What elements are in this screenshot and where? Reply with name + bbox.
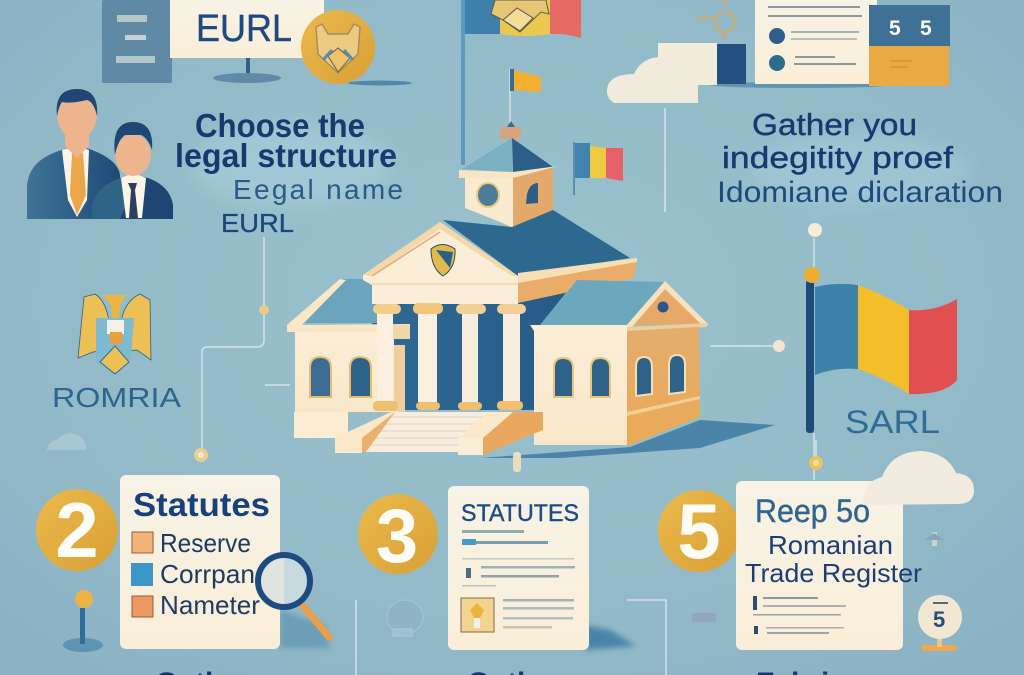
label: SARL: SARL [845,404,940,440]
badge: number 2 [36,486,118,574]
icon: monitor stand [213,58,281,83]
building: neoclassical government hall [287,121,775,458]
icon: medal number 5: 5 [933,607,945,632]
cupola [459,121,558,228]
badge: number 2: 2 [55,486,99,574]
stacked number box: 5 [920,17,932,40]
heading: choose the legal structure: EURL [221,208,294,238]
top centre flag [461,0,581,165]
mid flag [574,142,623,195]
navy recess behind columns [372,278,578,410]
left wing [287,279,410,438]
sign board: EURL [196,8,292,50]
right entablature side [518,259,637,303]
stacked number box: 5 [889,17,901,40]
card: Nameter [160,590,260,620]
cut-off captions at bottom edge [155,667,863,675]
connector lines [202,108,816,675]
badge: number 3: 3 [376,494,418,579]
icon: gold coat of arms coin [301,10,412,86]
heading: gather your identity proof: Idomiane diclaration [717,176,1003,209]
main roof [443,210,630,276]
icon: pin [63,590,103,652]
heading: gather your identity proof: Gather you [752,107,917,142]
connector dots [194,223,823,472]
heading: choose the legal structure: legal structure [175,137,397,174]
icon: cloud [607,57,698,103]
columns [373,303,526,411]
icon: filing cabinet [102,0,172,83]
soft glow behind right heading [750,134,970,206]
card: Reserve [160,528,251,558]
icon: medal number 5 [918,595,962,651]
step 5 panel [658,451,974,651]
card: Trade Register [745,558,922,588]
badge: number 3 [358,494,438,579]
card: Statutes [133,486,270,523]
ground shadow [480,420,775,458]
card [736,481,922,650]
badge: number 5: 5 [677,487,721,575]
card: STATUTES [461,500,579,527]
icon: faint cloud [387,600,423,636]
right flag [804,267,957,433]
label: ROMRIA: ROMRIA [52,382,181,413]
card: Reep 5o [755,493,870,529]
card [120,475,330,649]
heading: gather your identity proof [717,107,1003,209]
heading: choose the legal structure: Choose the [195,107,365,144]
step 2 panel [36,475,330,652]
card: Romanian [768,530,893,560]
sign board [170,0,324,58]
card [448,486,636,650]
small cloud left [47,433,87,450]
small box [658,43,746,85]
paper sheet [710,0,890,88]
step 3 panel [358,486,636,650]
heading: choose the legal structure: Eegal name [233,174,403,205]
icon: magnifying glass [258,555,329,637]
emblem on pediment [431,244,455,276]
card: Corrpan [160,559,255,589]
stacked number box [869,5,950,86]
right wing [530,280,709,446]
icon: cloud [863,451,974,505]
badge: number 5 [658,487,740,575]
panel: top left EURL display [102,0,412,86]
small orange flag [510,69,541,125]
faint marker [925,532,944,546]
soft glow behind left heading [190,123,390,207]
icon: small magnifier [697,0,735,40]
faint label [692,613,716,622]
icon: two businessmen [27,89,173,219]
steps [335,411,543,455]
emblem: Romanian eagle coat of arms [78,294,151,375]
panel: top right documents [607,0,950,103]
pediment [363,222,518,304]
heading: choose the legal structure [175,107,403,238]
heading: gather your identity proof: indegitity proef [722,140,953,175]
